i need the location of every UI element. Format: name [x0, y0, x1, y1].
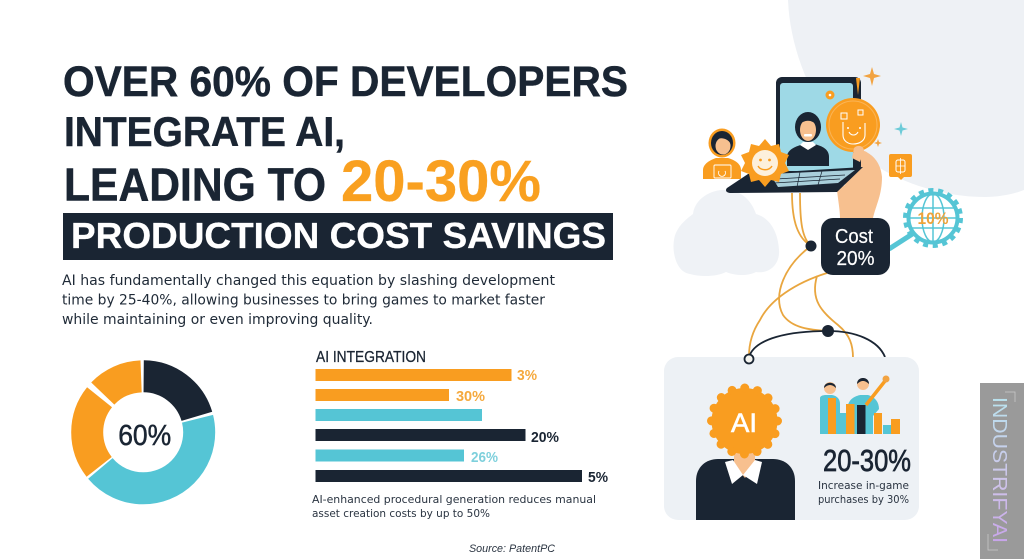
wire nodes: [806, 240, 834, 337]
watermark: [980, 383, 1024, 559]
donut chart: [87, 376, 199, 488]
cost badge: Cost: [835, 226, 873, 248]
connecting wires: [749, 193, 853, 358]
title: INTEGRATE AI,: [64, 108, 345, 155]
stat caption: [818, 480, 909, 506]
bar chart caption: [312, 494, 596, 520]
AI person figure: AI: [731, 408, 757, 438]
icon: orange sparkle: [863, 67, 881, 86]
title: LEADING TO: [64, 158, 326, 210]
icon: small sparkle: [874, 139, 882, 147]
ring connector: [744, 354, 754, 364]
laptop screen: [776, 77, 861, 172]
icon: orange square badge: [889, 154, 912, 180]
title: [63, 58, 628, 214]
fingers on coin: [852, 146, 864, 162]
icon: globe gear 10%: [906, 190, 960, 246]
black arc: [749, 331, 885, 357]
intro paragraph: [62, 273, 556, 328]
icon: person with laptop: [703, 128, 741, 179]
intro paragraph: while maintaining or even improving quality.: [62, 312, 373, 328]
icon: globe gear 10%: 10%: [918, 209, 948, 228]
stat: 20-30%: 20-30%: [823, 443, 911, 478]
bar chart: AI integration: 26%: [471, 450, 498, 466]
bar chart heading: AI INTEGRATION: [316, 349, 426, 366]
laptop illustration: [726, 77, 863, 193]
hand: [837, 151, 882, 218]
bar chart caption: AI-enhanced procedural generation reduces manual: [312, 494, 596, 506]
cost badge: 20%: [836, 248, 875, 270]
stat caption: purchases by 30%: [818, 494, 909, 506]
background cloud: [674, 190, 779, 276]
icon: teal sparkle: [894, 122, 908, 136]
bar chart caption: asset creation costs by up to 50%: [312, 508, 490, 520]
mini bar chart with people: [820, 376, 900, 434]
cost badge: [821, 218, 890, 275]
teal connector: [889, 231, 917, 249]
bar chart: AI integration: 5%: [588, 470, 608, 486]
bar chart: AI integration: 3%: [517, 368, 537, 384]
panel: AI card: [664, 354, 919, 520]
title: OVER 60% OF DEVELOPERS: [63, 58, 628, 106]
donut chart: 60%: [118, 420, 171, 452]
watermark: INDUSTRIFYAI: [988, 397, 1010, 543]
laptop base: [726, 167, 863, 193]
title: 20-30%: [341, 149, 541, 214]
AI person figure: [696, 388, 795, 520]
person on screen: [787, 112, 829, 166]
icon: smiling gear: [741, 139, 789, 187]
background blob: [788, 0, 1024, 197]
icon: orange smile coin: [826, 98, 880, 152]
intro paragraph: AI has fundamentally changed this equation by slashing development: [62, 273, 556, 289]
bar chart: AI integration: [316, 349, 608, 486]
small orange dot: [826, 90, 834, 100]
stat caption: Increase in-game: [818, 480, 909, 492]
bar chart: AI integration: 30%: [456, 389, 485, 405]
title banner: PRODUCTION COST SAVINGS: [71, 215, 606, 256]
bar chart: AI integration: 20%: [531, 430, 559, 446]
source: Source: PatentPC: [469, 543, 555, 555]
intro paragraph: time by 25-40%, allowing businesses to bring games to market faster: [62, 292, 545, 308]
